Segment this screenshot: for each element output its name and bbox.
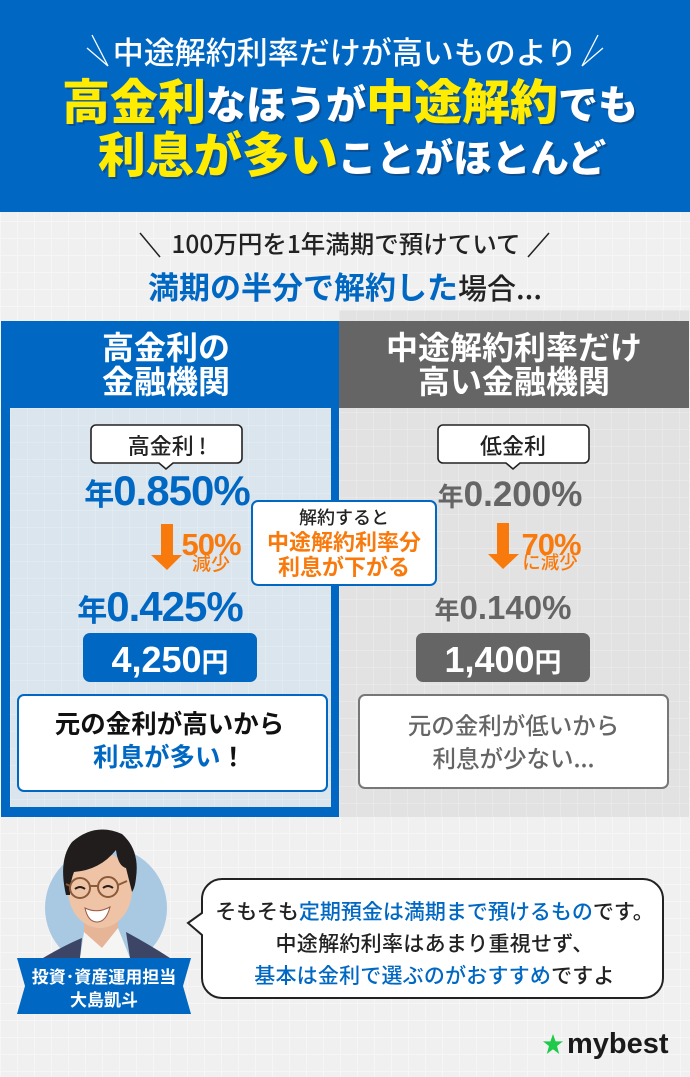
header slashes xyxy=(86,34,604,66)
header band xyxy=(0,0,690,212)
left speech tag xyxy=(90,424,243,470)
right tag text: 低金利 xyxy=(480,429,546,461)
right amount pill: 1,400円 xyxy=(444,639,562,680)
left tag text: 高金利 ! xyxy=(128,429,206,461)
logo star xyxy=(543,1034,563,1054)
right amount pill xyxy=(416,633,590,682)
mybest logo xyxy=(543,1028,669,1060)
right conclusion box xyxy=(358,694,669,789)
right reduction label: 70% xyxy=(521,527,581,562)
expert speech text: 中途解約利率はあまり重視せず、 xyxy=(275,928,594,958)
jacket xyxy=(43,932,170,958)
left panel heading: 高金利の xyxy=(102,323,230,369)
intro subheading: 満期の半分で解約した場合... xyxy=(148,263,542,308)
right panel heading xyxy=(339,321,689,408)
left arrow xyxy=(151,524,182,570)
expert speech bubble xyxy=(186,878,664,999)
right arrow xyxy=(488,523,519,569)
intro slashes xyxy=(140,232,550,258)
left rate before: 年0.850% xyxy=(84,467,250,514)
left conclusion box xyxy=(17,694,328,792)
left panel heading: 金融機関 xyxy=(102,357,230,403)
face xyxy=(68,852,132,928)
expert speech text xyxy=(215,896,654,990)
logo wordmark: mybest xyxy=(567,1028,669,1060)
left conclusion box: 元の金利が高いから xyxy=(55,704,284,741)
name ribbon: 投資･資産運用担当 xyxy=(32,963,176,988)
expert speech text: 基本は金利で選ぶのがおすすめですよ xyxy=(254,960,615,990)
left amount pill: 4,250円 xyxy=(111,639,229,680)
right rate after: 年0.140% xyxy=(435,589,571,627)
main title line one: 高金利なほうが中途解約でも xyxy=(62,63,638,133)
right conclusion box: 利息が少ない... xyxy=(432,740,594,774)
right panel: mid-term rate only xyxy=(339,310,689,817)
center callout xyxy=(251,500,437,586)
center callout: 利息が下がる xyxy=(278,550,410,582)
header lead line: 中途解約利率だけが高いものより xyxy=(113,28,577,73)
right panel heading: 高い金融機関 xyxy=(418,357,610,403)
smile xyxy=(85,907,110,922)
intro line: 100万円を1年満期で預けていて xyxy=(171,226,521,261)
hair xyxy=(63,830,137,895)
center callout: 中途解約利率分 xyxy=(267,525,421,557)
left reduction label: 50% xyxy=(181,527,241,562)
neck xyxy=(84,910,118,950)
right reduction note: に減少 xyxy=(522,549,578,575)
expert portrait xyxy=(43,830,170,958)
name ribbon: 大島凱斗 xyxy=(70,986,138,1011)
shirt xyxy=(80,928,130,958)
main title line two: 利息が多いことがほとんど xyxy=(98,116,606,186)
left panel body xyxy=(10,408,331,807)
right conclusion box: 元の金利が低いから xyxy=(408,707,619,741)
portrait circle xyxy=(45,847,167,969)
right panel heading: 中途解約利率だけ xyxy=(386,323,642,369)
left panel heading xyxy=(102,323,230,403)
right speech tag xyxy=(437,424,590,470)
glasses xyxy=(66,877,127,898)
center callout: 解約すると xyxy=(299,504,389,530)
left reduction note: 減少 xyxy=(192,549,230,576)
right rate before: 年0.200% xyxy=(438,475,582,514)
left rate after: 年0.425% xyxy=(77,583,243,630)
eyes xyxy=(75,886,113,889)
left panel: high rate xyxy=(1,321,339,817)
name ribbon xyxy=(17,958,191,1014)
expert speech text: そもそも定期預金は満期まで預けるものです。 xyxy=(215,896,654,926)
left amount pill xyxy=(83,633,257,682)
left conclusion box: 利息が多い！ xyxy=(93,737,246,774)
